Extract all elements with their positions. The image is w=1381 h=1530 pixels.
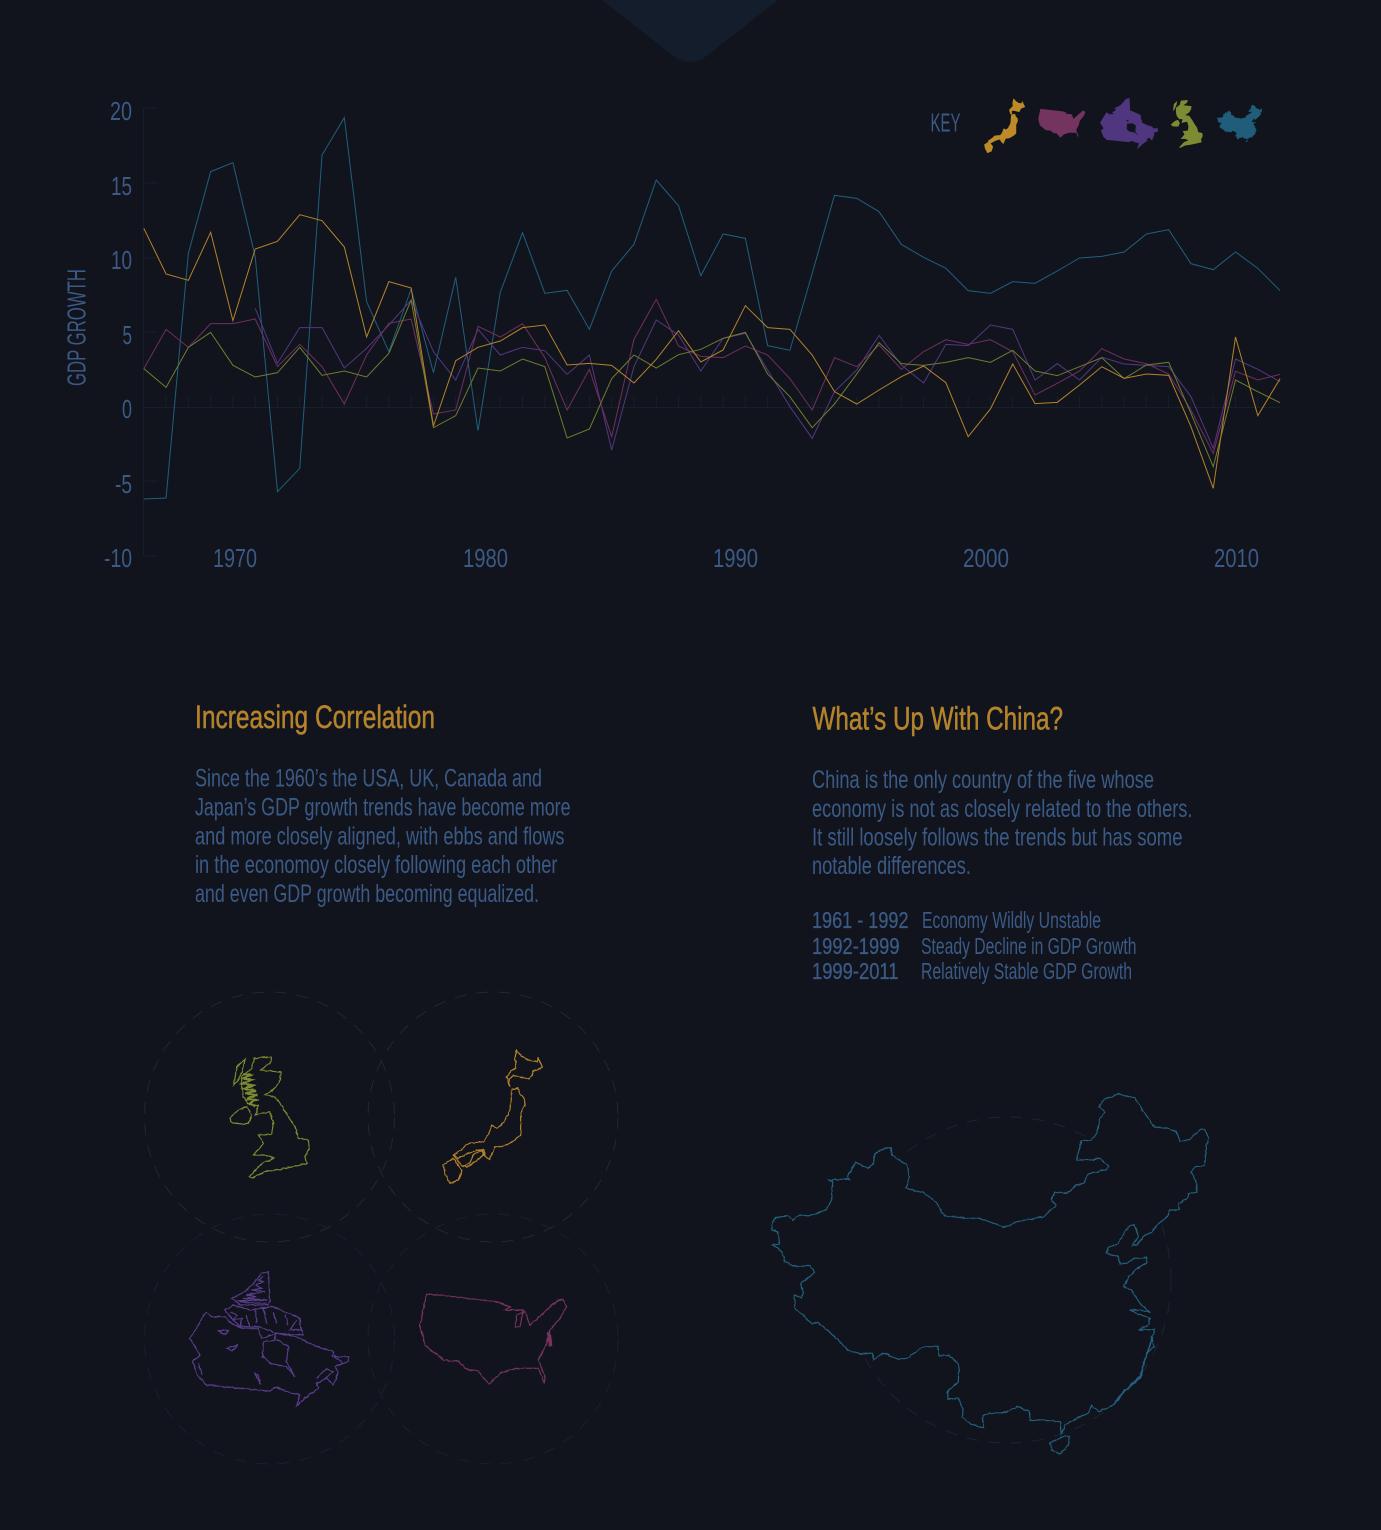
chart axes and ticks bbox=[144, 108, 1280, 556]
icon: Japan bbox=[985, 100, 1024, 152]
body copy bbox=[195, 764, 570, 908]
dashed rings bbox=[144, 992, 618, 1464]
text block: what's up with China bbox=[812, 700, 1192, 984]
y axis labels: 10 bbox=[111, 245, 132, 275]
icon: Canada, Hudson Bay bbox=[1127, 123, 1138, 136]
key label: KEY bbox=[930, 108, 960, 138]
icon: UK bbox=[1171, 100, 1203, 148]
body copy: It still loosely follows the trends but has some bbox=[812, 824, 1182, 852]
y axis labels: -5 bbox=[115, 469, 132, 499]
y axis labels bbox=[104, 96, 132, 573]
timeline list bbox=[812, 907, 1136, 984]
series: Japan bbox=[144, 215, 1280, 488]
timeline list: Steady Decline in GDP Growth bbox=[921, 933, 1136, 959]
timeline list: 1992-1999 bbox=[812, 933, 900, 959]
key bbox=[930, 99, 1262, 152]
y axis labels: 15 bbox=[111, 171, 132, 201]
map: China bbox=[772, 1094, 1208, 1454]
timeline list: Relatively Stable GDP Growth bbox=[921, 958, 1132, 984]
y axis labels: 5 bbox=[122, 320, 132, 350]
series: UK bbox=[144, 300, 1280, 467]
x axis labels bbox=[213, 543, 1259, 573]
timeline list: Economy Wildly Unstable bbox=[922, 907, 1101, 933]
series: Canada bbox=[255, 300, 1280, 450]
text block: increasing correlation bbox=[195, 699, 570, 908]
heading: Increasing Correlation bbox=[195, 699, 435, 735]
y axis title: GDP GROWTH bbox=[62, 269, 92, 386]
body copy: in the economoy closely following each other bbox=[195, 851, 558, 879]
series: China bbox=[144, 118, 1280, 499]
x axis labels: 2000 bbox=[963, 543, 1009, 573]
icon: China bbox=[1217, 105, 1262, 142]
icon: Canada bbox=[1101, 99, 1157, 147]
data series bbox=[144, 118, 1280, 499]
y axis labels: -10 bbox=[104, 543, 132, 573]
x axis labels: 1990 bbox=[713, 543, 758, 573]
panel: four country outlines in dashed circles bbox=[144, 992, 618, 1464]
body copy: and even GDP growth becoming equalized. bbox=[195, 880, 539, 908]
timeline list: 1999-2011 bbox=[812, 958, 898, 984]
map: USA bbox=[420, 1294, 567, 1384]
map: Japan bbox=[443, 1051, 543, 1183]
icon: USA bbox=[1038, 109, 1085, 138]
y axis labels: 20 bbox=[110, 96, 132, 126]
body copy bbox=[812, 766, 1192, 880]
body copy: China is the only country of the five whose bbox=[812, 766, 1154, 794]
top chevron tab bbox=[602, 0, 778, 62]
body copy: economy is not as closely related to the others. bbox=[812, 795, 1192, 823]
dashed ring bbox=[845, 1117, 1171, 1443]
map: UK bbox=[229, 1057, 309, 1177]
body copy: notable differences. bbox=[812, 852, 971, 880]
body copy: Since the 1960’s the USA, UK, Canada and bbox=[195, 764, 542, 792]
heading: What’s Up With China? bbox=[812, 700, 1063, 736]
x axis labels: 2010 bbox=[1214, 543, 1259, 573]
y axis labels: 0 bbox=[122, 394, 132, 424]
x axis labels: 1980 bbox=[463, 543, 508, 573]
panel: China outline map bbox=[772, 1094, 1208, 1454]
background fill hiding ring inside the country bbox=[772, 1094, 1208, 1454]
line chart: GDP growth bbox=[62, 96, 1280, 573]
body copy: Japan’s GDP growth trends have become more bbox=[195, 794, 570, 822]
timeline list: 1961 - 1992 bbox=[812, 907, 908, 933]
x axis labels: 1970 bbox=[213, 543, 257, 573]
series: USA bbox=[144, 299, 1280, 453]
body copy: and more closely aligned, with ebbs and flows bbox=[195, 822, 564, 850]
map: Canada bbox=[190, 1272, 348, 1406]
